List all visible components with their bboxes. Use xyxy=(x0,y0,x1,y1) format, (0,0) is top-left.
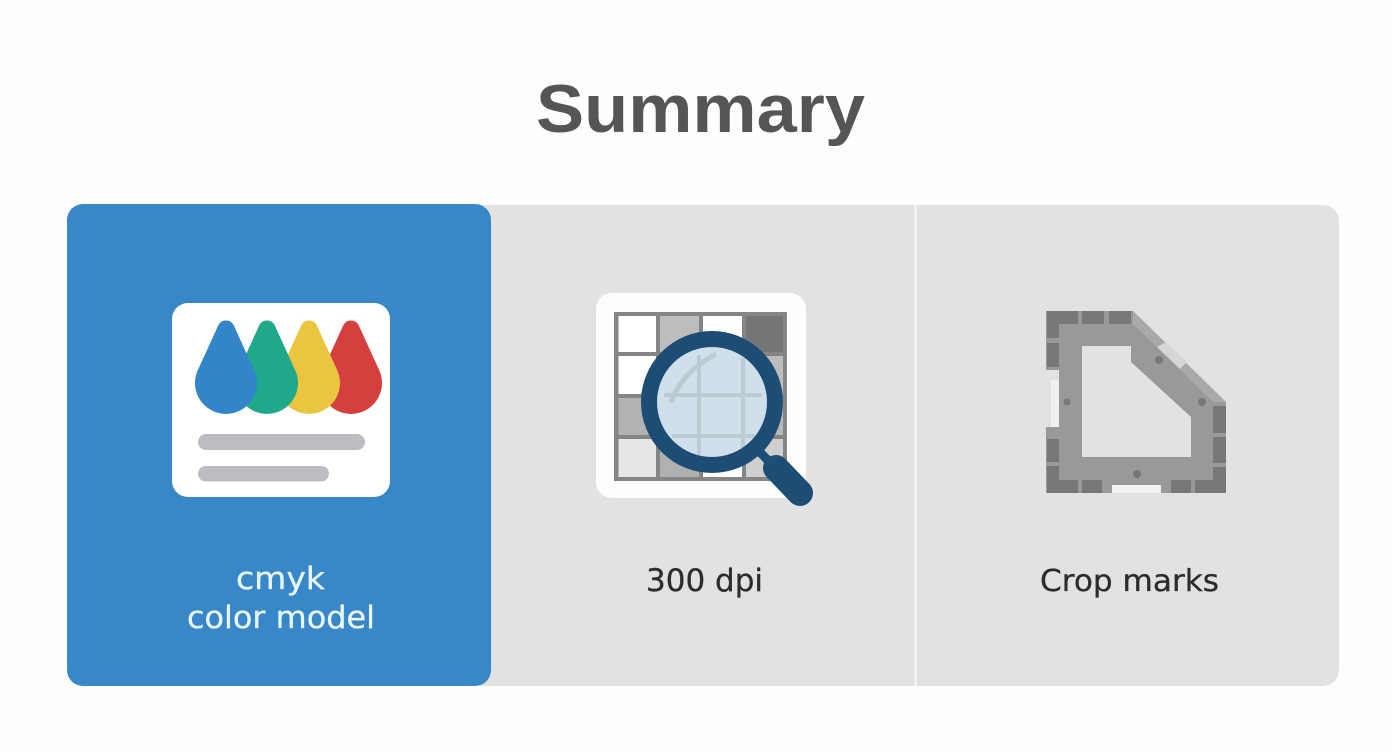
grid row 4 cells xyxy=(618,439,783,477)
frame body xyxy=(1046,311,1226,493)
panel: cmyk color model xyxy=(67,204,491,686)
icon: magnifying glass xyxy=(649,339,800,493)
panel: grey background for 300 dpi and crop marks xyxy=(480,205,1339,686)
blue card background xyxy=(67,204,491,686)
icon: pixel grid under magnifier xyxy=(596,293,806,498)
yellow drop xyxy=(278,320,340,414)
blue drop xyxy=(195,320,257,414)
grid row 1 cells xyxy=(618,316,783,352)
icon: cmyk ink drops card xyxy=(172,303,390,497)
lens xyxy=(656,346,768,458)
dark edge blocks xyxy=(1047,311,1226,493)
panel divider xyxy=(914,205,916,686)
magnified grid lines xyxy=(664,354,762,455)
label: 300 dpi: 300 dpi xyxy=(646,563,763,599)
light worn patches xyxy=(1046,342,1187,493)
green drop xyxy=(236,320,298,414)
magnifier handle xyxy=(776,468,800,493)
panel: crop marks xyxy=(1040,311,1226,599)
label: crop marks: Crop marks xyxy=(1040,564,1219,599)
title: Summary xyxy=(536,71,865,147)
magnifier ring xyxy=(649,339,775,465)
light diagonal band xyxy=(1133,311,1226,402)
magnifier neck xyxy=(757,449,778,471)
long grey text bar xyxy=(198,434,365,450)
panel: 300 dpi xyxy=(596,293,806,599)
grid row 3 cells xyxy=(618,398,783,435)
label: cmyk color model: cmyk xyxy=(236,561,326,597)
grid row 2 cells xyxy=(618,356,783,394)
icon card background xyxy=(172,303,390,497)
grid card background xyxy=(596,293,806,498)
icon: crop marks frame xyxy=(1046,311,1226,493)
short grey text bar xyxy=(198,466,329,482)
label: cmyk color model: color model xyxy=(187,600,375,636)
grid frame fill xyxy=(614,312,787,481)
red drop xyxy=(320,320,382,414)
registration dots xyxy=(1064,356,1206,478)
